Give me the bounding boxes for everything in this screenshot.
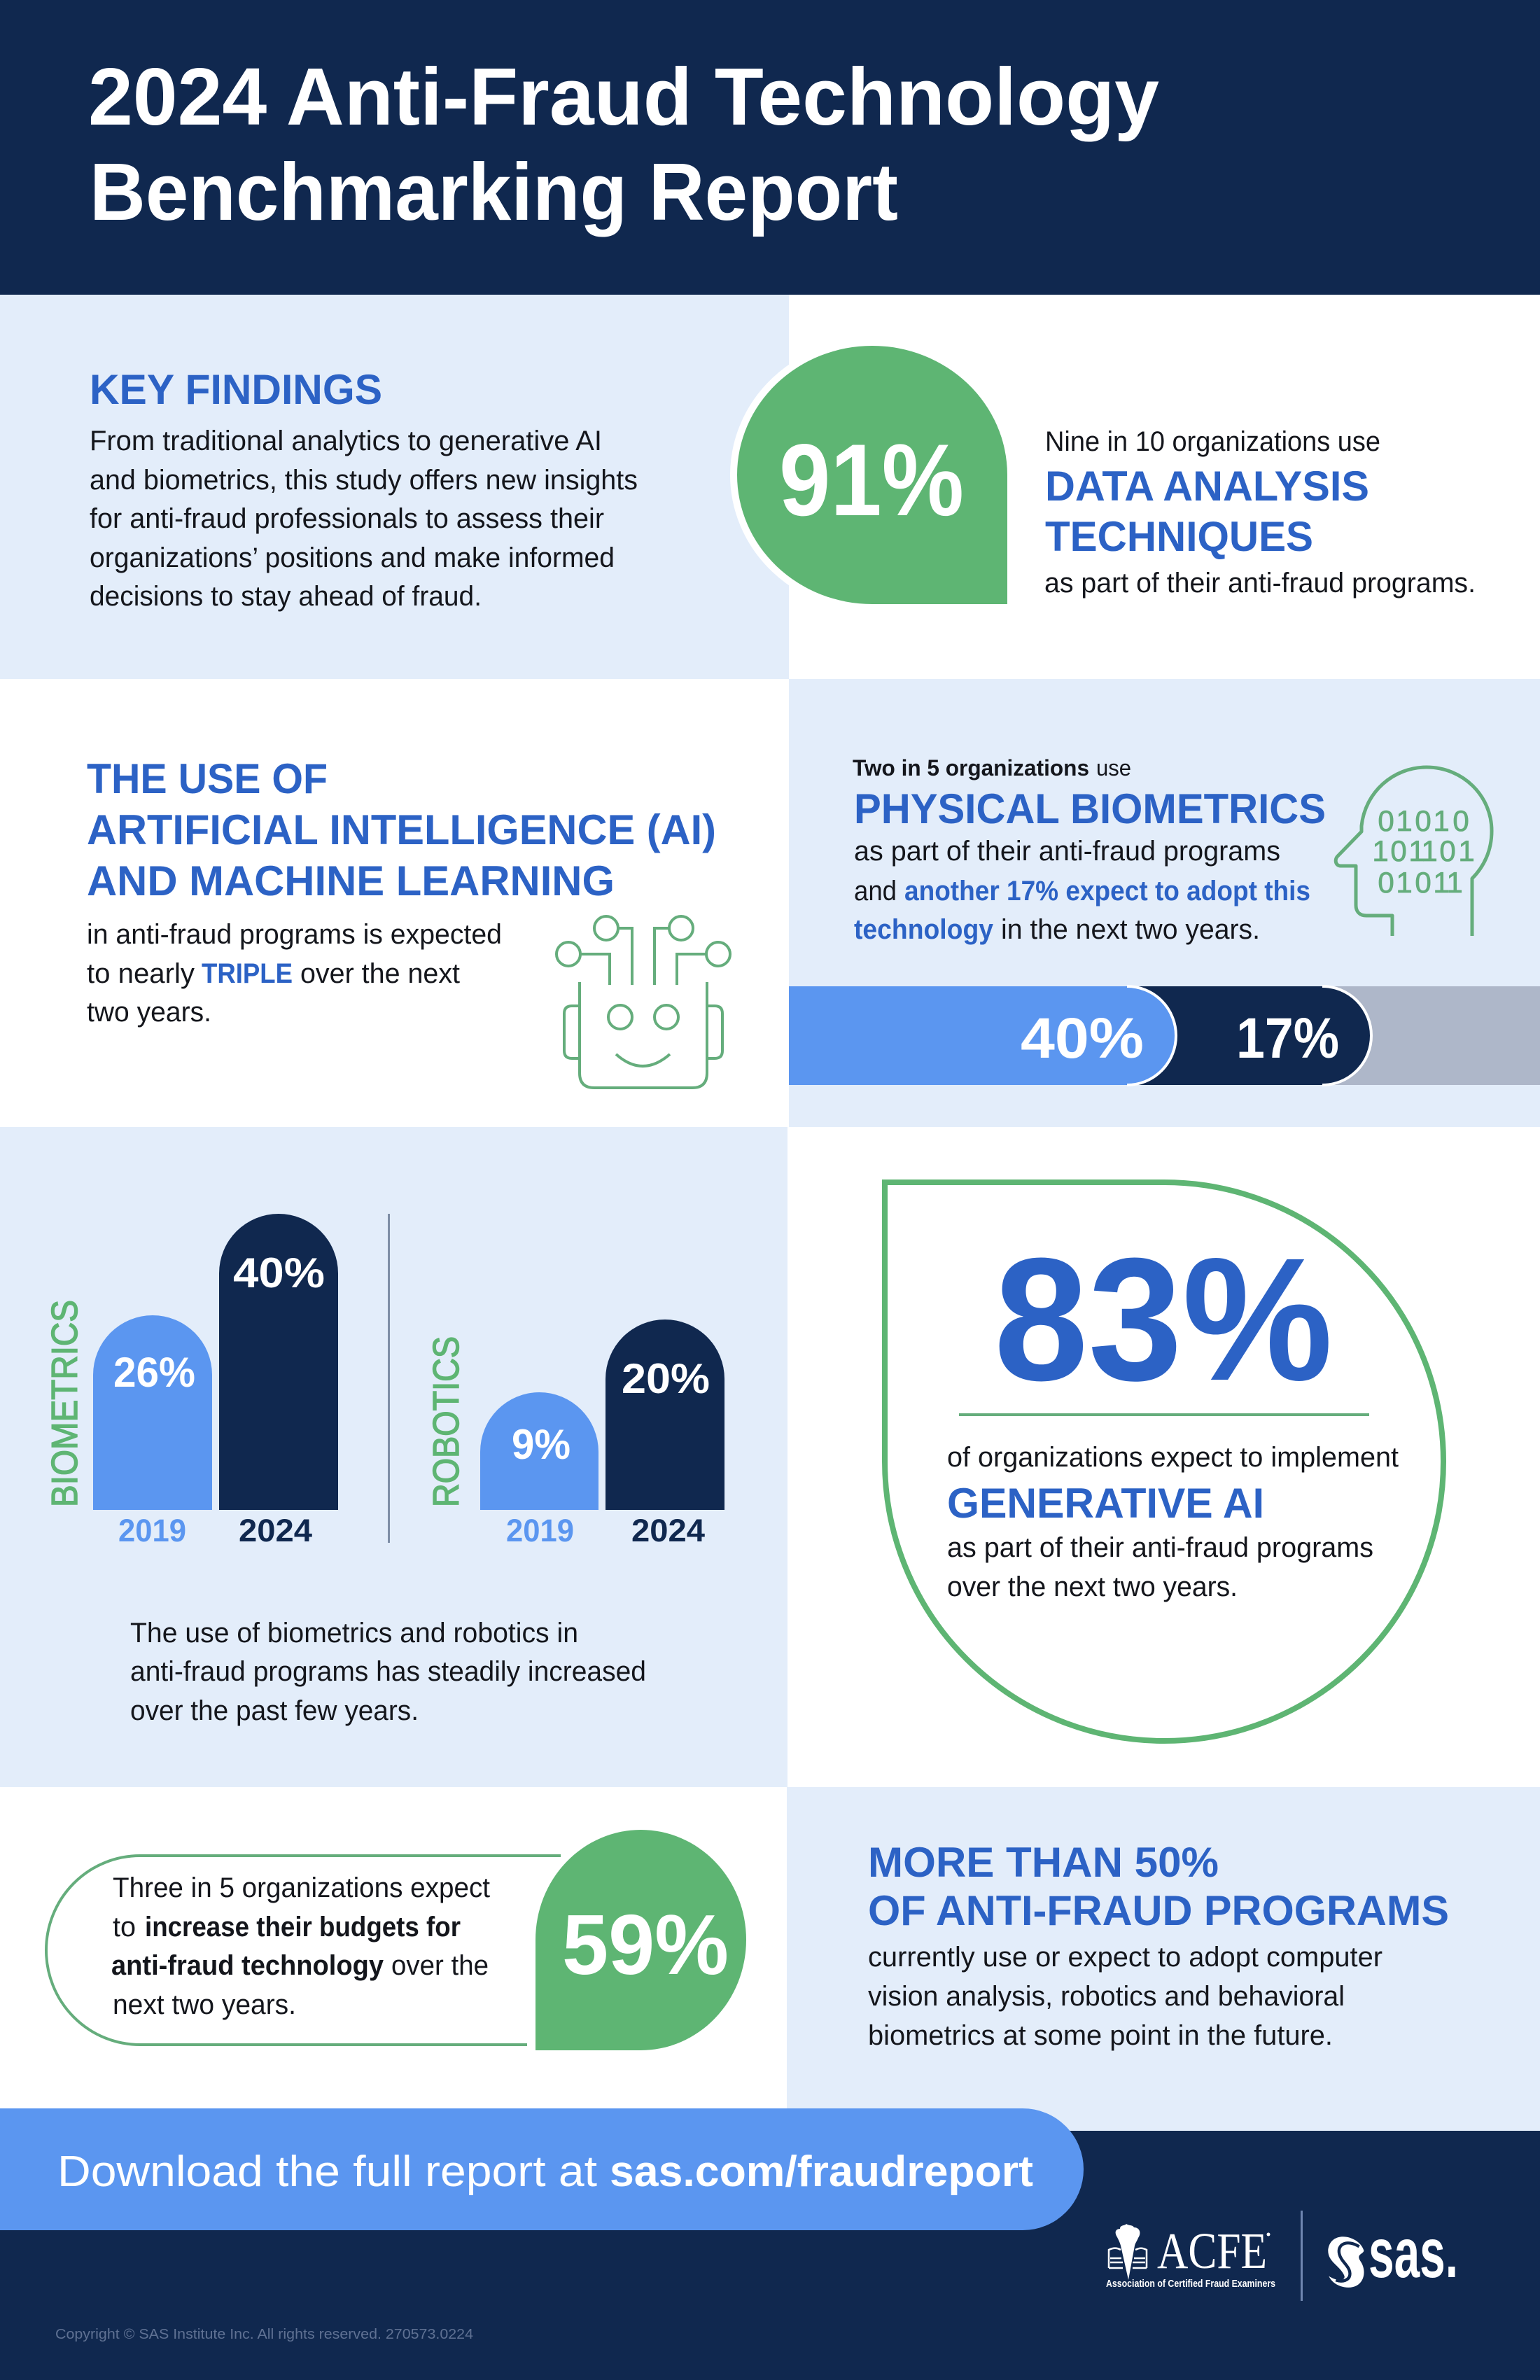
text block: budgets: over the xyxy=(391,1950,489,1981)
teardrop: 91%: 91% xyxy=(779,423,964,537)
heading: more than 50% xyxy=(868,1839,1449,1934)
text block: generative AI: as part of their anti-fraud programs xyxy=(947,1532,1373,1563)
icon: head with binary digits: 101101 xyxy=(1372,834,1475,867)
chart: robotics bars: 2024 xyxy=(631,1513,705,1548)
text block: key findings: organizations’ positions and make informed xyxy=(90,542,615,573)
logo: ACFE: ACFE xyxy=(1157,2222,1267,2279)
chart: robotics bars: 2019 xyxy=(506,1513,574,1548)
text block: physical biometrics xyxy=(853,755,1326,945)
title: Benchmarking Report xyxy=(90,146,898,237)
text block: generative AI: over the next two years. xyxy=(947,1572,1238,1602)
chart: biometrics bars: BIOMETRICS xyxy=(45,1300,85,1507)
text block: physical biometrics: another 17% expect to adopt this xyxy=(904,876,1310,906)
teardrop: 59%: 59% xyxy=(562,1897,729,1992)
text block: physical biometrics: PHYSICAL BIOMETRICS xyxy=(854,785,1326,832)
text block: generative AI: GENERATIVE AI xyxy=(947,1480,1264,1527)
text block: key findings: for anti-fraud professionals to assess their xyxy=(90,503,604,534)
panel: key findings xyxy=(0,295,789,679)
text block: AI expected to triple: to nearly xyxy=(87,958,195,989)
text block: biometrics and robotics: The use of biometrics and robotics in xyxy=(130,1618,578,1648)
text block: physical biometrics: Two in 5 organizations xyxy=(853,755,1089,780)
text block: key findings xyxy=(90,426,638,612)
text block: physical biometrics: as part of their anti-fraud programs xyxy=(854,836,1280,867)
chart: robotics bars: 9% xyxy=(512,1421,570,1468)
text block: budgets xyxy=(111,1872,490,2020)
chart: biometrics bars: 26% xyxy=(113,1349,195,1396)
stat: 83%: 83% xyxy=(994,1222,1333,1417)
text block: physical biometrics: and xyxy=(854,876,897,906)
text block: budgets: increase their budgets for xyxy=(145,1912,461,1942)
chart: biometrics bars: 40% xyxy=(233,1250,325,1296)
text block: budgets: next two years. xyxy=(113,1989,296,2020)
teardrop: 59% xyxy=(536,1830,746,2050)
title xyxy=(88,51,1159,237)
text block: more than 50%: vision analysis, robotics and behavioral xyxy=(868,1981,1345,2012)
header panel xyxy=(0,0,1540,295)
teardrop: 91% xyxy=(737,346,1007,604)
call to action banner xyxy=(0,2108,1084,2230)
call to action banner: Download the full report at xyxy=(57,2148,597,2196)
logo: ACFE: Association of Certified Fraud Examiners xyxy=(1106,2278,1275,2290)
text block: AI expected to triple: in anti-fraud programs is expected xyxy=(87,919,502,950)
text block: generative AI: of organizations expect to implement xyxy=(947,1442,1399,1473)
chart: robotics bars: 20% xyxy=(622,1355,710,1402)
text block: data analysis: DATA ANALYSIS xyxy=(1045,463,1369,510)
footer panel xyxy=(0,2108,1540,2380)
panel: data analysis xyxy=(737,346,1476,604)
logo: ACFE xyxy=(1106,2222,1275,2290)
heading: more than 50%: MORE THAN 50% xyxy=(868,1839,1219,1886)
chart: progress bar 40% and 17%: 40% xyxy=(1021,1007,1144,1070)
chart: robotics bars xyxy=(426,1320,724,1548)
panel: physical biometrics xyxy=(789,679,1540,1127)
panel: budgets 59% xyxy=(46,1830,746,2050)
text block: key findings: decisions to stay ahead of fraud. xyxy=(90,581,482,612)
icon: head with binary digits xyxy=(1336,767,1492,936)
text block: generative AI xyxy=(947,1442,1399,1602)
text block: biometrics and robotics xyxy=(130,1618,646,1726)
text block: AI expected to triple xyxy=(87,919,502,1028)
text block: data analysis: TECHNIQUES xyxy=(1045,513,1313,560)
icon: head with binary digits: 01011 xyxy=(1378,866,1463,899)
chart: robotics bars: ROBOTICS xyxy=(426,1336,467,1507)
text block: physical biometrics: technology xyxy=(854,914,994,945)
logo: SAS xyxy=(1328,2214,1458,2292)
icon: head with binary digits: 01010 xyxy=(1378,804,1469,837)
chart: biometrics bars: 2024 xyxy=(239,1513,312,1548)
text block: biometrics and robotics: anti-fraud programs has steadily increased xyxy=(130,1656,646,1687)
text block: more than 50% xyxy=(868,1942,1382,2051)
chart: progress bar 40% and 17% xyxy=(789,986,1540,1085)
text block: budgets: anti-fraud technology xyxy=(111,1950,384,1981)
panel: more than 50% xyxy=(787,1787,1540,2131)
chart: biometrics bars xyxy=(45,1214,338,1548)
title: 2024 Anti-Fraud Technology xyxy=(88,51,1159,142)
heading: AI and machine learning xyxy=(87,755,716,904)
text block: key findings: From traditional analytics to generative AI xyxy=(90,426,602,456)
logo: SAS: sas. xyxy=(1368,2214,1458,2292)
heading: AI and machine learning: AND MACHINE LEARNING xyxy=(87,858,615,904)
heading: more than 50%: OF ANTI-FRAUD PROGRAMS xyxy=(868,1887,1449,1934)
text block: AI expected to triple: over the next xyxy=(300,958,460,989)
heading: AI and machine learning: ARTIFICIAL INTELLIGENCE (AI) xyxy=(87,806,716,853)
text block: physical biometrics: use xyxy=(1096,755,1131,780)
panel: artificial intelligence xyxy=(87,755,730,1088)
text block: AI expected to triple: TRIPLE xyxy=(202,958,293,989)
text block: data analysis: as part of their anti-fraud programs. xyxy=(1044,568,1476,598)
panel: generative AI teardrop xyxy=(885,1182,1443,1741)
panel: biometrics and robotics xyxy=(0,1127,788,1787)
text block: biometrics and robotics: over the past few years. xyxy=(130,1695,419,1726)
copyright: Copyright © SAS Institute Inc. All rights reserved. 270573.0224 xyxy=(55,2327,473,2342)
text block: more than 50%: currently use or expect to adopt computer xyxy=(868,1942,1382,1973)
icon: robot head xyxy=(556,916,730,1088)
text block: budgets: Three in 5 organizations expect xyxy=(113,1872,490,1903)
chart: biometrics bars: 2019 xyxy=(118,1513,186,1548)
heading: key findings: KEY FINDINGS xyxy=(90,366,382,413)
call to action banner: sas.com/fraudreport xyxy=(610,2148,1033,2196)
text block: more than 50%: biometrics at some point in the future. xyxy=(868,2020,1333,2051)
chart: progress bar 40% and 17%: 17% xyxy=(1236,1007,1339,1070)
text block: key findings: and biometrics, this study offers new insights xyxy=(90,465,638,496)
text block: physical biometrics: in the next two years. xyxy=(1001,914,1260,945)
text block: data analysis xyxy=(1044,426,1476,598)
heading: AI and machine learning: THE USE OF xyxy=(87,755,328,802)
text block: budgets: to xyxy=(113,1912,136,1942)
text block: AI expected to triple: two years. xyxy=(87,997,211,1028)
text block: data analysis: Nine in 10 organizations use xyxy=(1045,426,1380,457)
